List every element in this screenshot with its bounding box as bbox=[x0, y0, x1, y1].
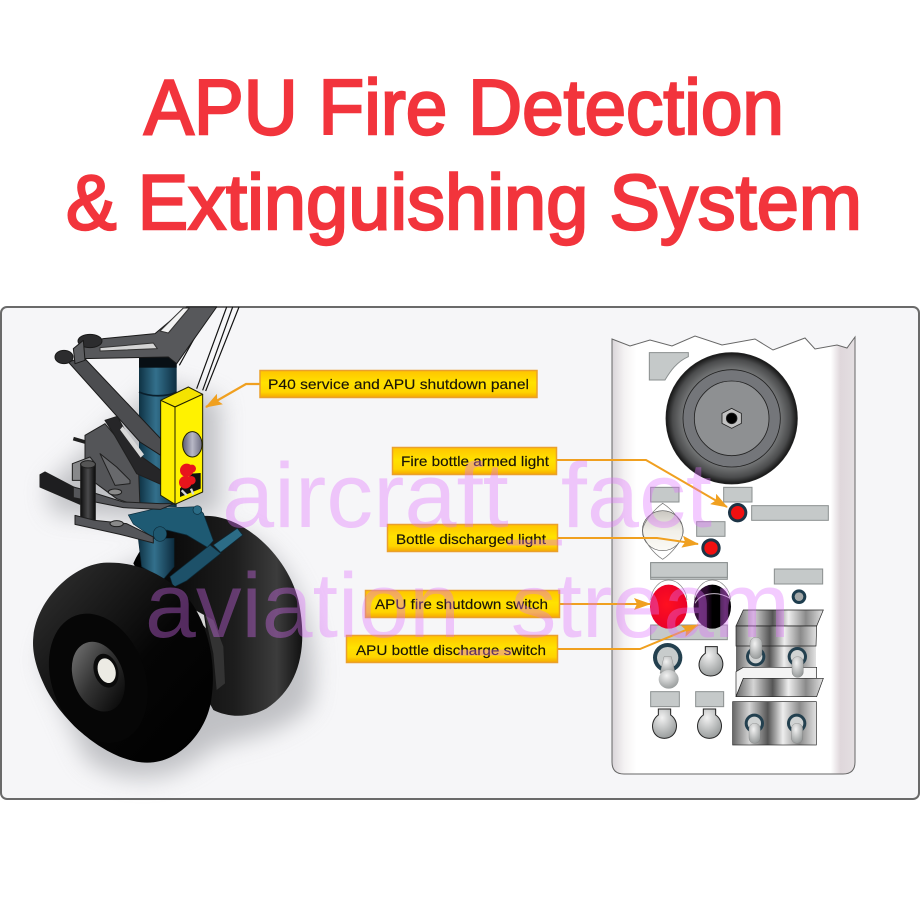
drop shadow of gear bbox=[43, 383, 314, 778]
label: P40 service and APU shutdown panel: P40 service and APU shutdown panel bbox=[268, 376, 529, 392]
lower strut and torque link bbox=[128, 506, 243, 587]
main strut bbox=[139, 357, 177, 507]
front wheel axle bbox=[89, 650, 123, 691]
actuator rods bbox=[179, 307, 239, 391]
indicator: lens bbox=[642, 503, 683, 559]
dial: access door bbox=[666, 353, 797, 484]
illustration: nose landing gear bbox=[32, 383, 314, 778]
light: bottle discharged bbox=[701, 538, 721, 558]
lower fork plates and pistons bbox=[40, 461, 174, 543]
leader: fire bottle armed arrow bbox=[557, 460, 727, 507]
label: APU fire shutdown switch bbox=[366, 590, 560, 618]
watermark: aircraft_fact: aircraft_fact bbox=[222, 445, 712, 547]
switch: APU bottle discharge black guard bbox=[694, 580, 731, 629]
leader: APU fire shutdown arrow bbox=[560, 603, 650, 605]
watermark: aviation_stream: aviation_stream bbox=[145, 555, 790, 657]
placards: grey labels bbox=[651, 487, 828, 579]
label: P40 service and APU shutdown panel bbox=[260, 370, 537, 398]
round keyed blanks bbox=[653, 647, 723, 738]
label: Fire bottle armed light bbox=[392, 448, 556, 474]
label: Bottle discharged light bbox=[388, 524, 558, 552]
placard: corner label bbox=[649, 353, 688, 380]
screw bbox=[792, 589, 806, 604]
front wheel face bbox=[32, 600, 165, 757]
red switches on P40 panel bbox=[179, 464, 201, 497]
label: APU bottle discharge switch: APU bottle discharge switch bbox=[356, 642, 546, 658]
title: & Extinguishing System bbox=[66, 158, 862, 246]
gear upper assembly bbox=[40, 307, 239, 543]
front wheel hub bbox=[63, 634, 134, 719]
panel body bbox=[612, 336, 855, 774]
title: APU Fire Detection bbox=[144, 63, 784, 151]
steering actuator block bbox=[72, 416, 161, 507]
light: fire bottle armed bbox=[728, 503, 747, 522]
upper fork bracket bbox=[55, 307, 217, 455]
yellow P40 panel box bbox=[161, 387, 203, 504]
label: Bottle discharged light: Bottle discharged light bbox=[396, 531, 546, 547]
leader: P40 panel arrow bbox=[206, 384, 260, 407]
instrument panel close-up bbox=[612, 336, 855, 774]
toggle switches bbox=[653, 637, 807, 743]
switch: APU fire shutdown red guard bbox=[650, 580, 687, 629]
bracket: chrome guards bbox=[733, 610, 823, 745]
leader: bottle discharged arrow bbox=[558, 538, 698, 544]
rear wheel hub glimpse bbox=[195, 610, 225, 690]
title bbox=[66, 63, 862, 246]
placards: lower grey labels bbox=[651, 563, 823, 707]
leader: APU bottle discharge arrow bbox=[558, 625, 698, 649]
label: APU fire shutdown switch: APU fire shutdown switch bbox=[375, 596, 548, 612]
label: Fire bottle armed light: Fire bottle armed light bbox=[401, 453, 549, 469]
front wheel bbox=[33, 563, 213, 763]
label: APU bottle discharge switch bbox=[346, 636, 558, 662]
rear wheel bbox=[133, 516, 302, 716]
panel: diagram background bbox=[1, 307, 919, 799]
